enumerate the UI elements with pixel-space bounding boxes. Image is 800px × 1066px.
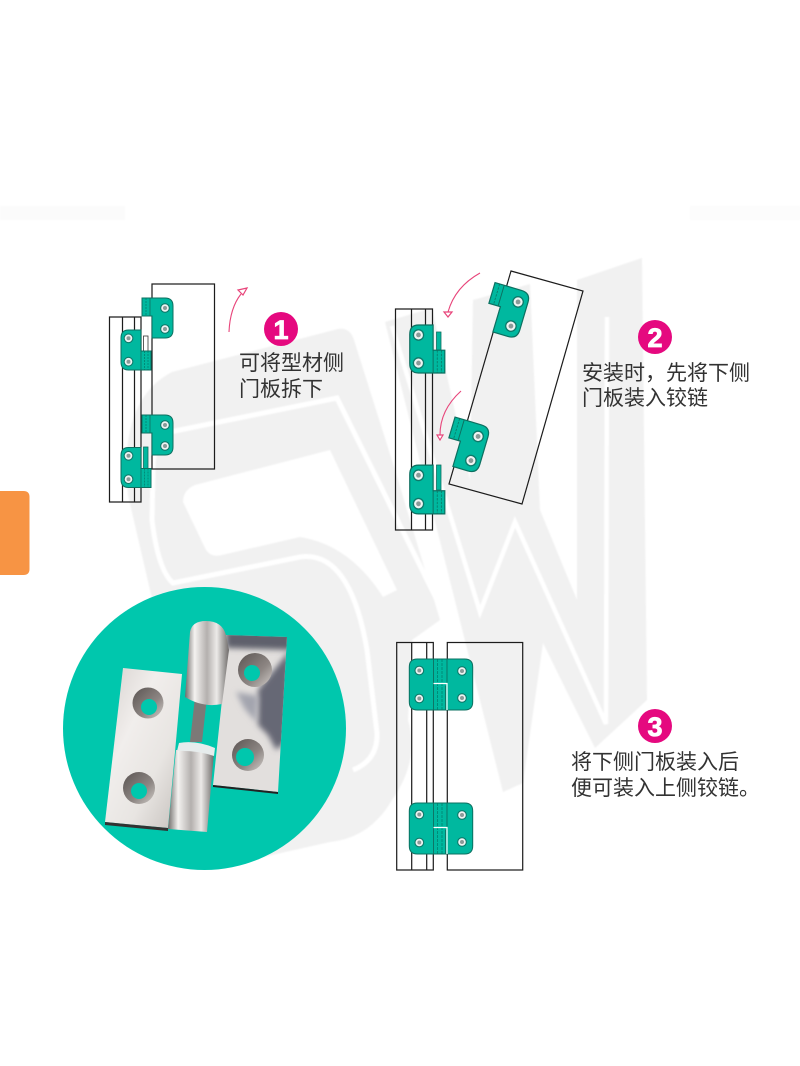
text: step 2: 安装时，先将下侧 [582,362,750,385]
frame profile [396,309,432,530]
frame profile [110,317,141,502]
watermark letter S [126,329,440,868]
badge 2: 2 [647,323,663,353]
badge 3: 3 [647,712,663,742]
lower knuckle [168,750,214,832]
arrow: step 2 upper [444,273,480,317]
frame profile [397,642,433,870]
door panel [447,642,523,870]
step 1 diagram [110,284,214,502]
watermark letter W [385,258,647,792]
text: step 1: 门板拆下 [239,378,323,401]
arrow: step 2 lower [437,391,461,440]
right leaf [213,630,292,794]
badge 1 [264,312,298,346]
watermark: SW logo [126,258,647,868]
step 3 diagram [397,642,523,870]
faint top band [0,206,800,220]
frame hinges [121,330,151,488]
orange side tab [0,491,30,575]
left leaf [105,668,182,831]
text: step 3: 便可装入上侧铰链。 [571,777,760,800]
frame hinges [410,325,445,514]
door panel tilted [449,271,583,504]
text: step 1 [239,352,344,401]
arrow: step 1 lift door [229,288,247,332]
badge 3 [638,709,672,743]
text: step 2 [582,362,750,410]
text: step 3: 将下侧门板装入后 [571,751,739,774]
product photo: steel hinge [105,621,292,832]
badge 2 [638,320,672,354]
assembled hinges [409,659,473,854]
step 2 diagram [396,271,583,530]
text: step 1: 可将型材侧 [239,352,344,375]
door panel [152,284,214,469]
badge 1: 1 [273,315,289,345]
pin [190,697,207,742]
door hinges [142,298,173,455]
nylon washer [177,742,215,756]
text: step 2: 门板装入铰链 [582,387,708,410]
door hinges tilted [441,283,531,474]
teal circle [63,587,346,870]
upper knuckle [185,621,229,705]
text: step 3 [571,751,760,800]
